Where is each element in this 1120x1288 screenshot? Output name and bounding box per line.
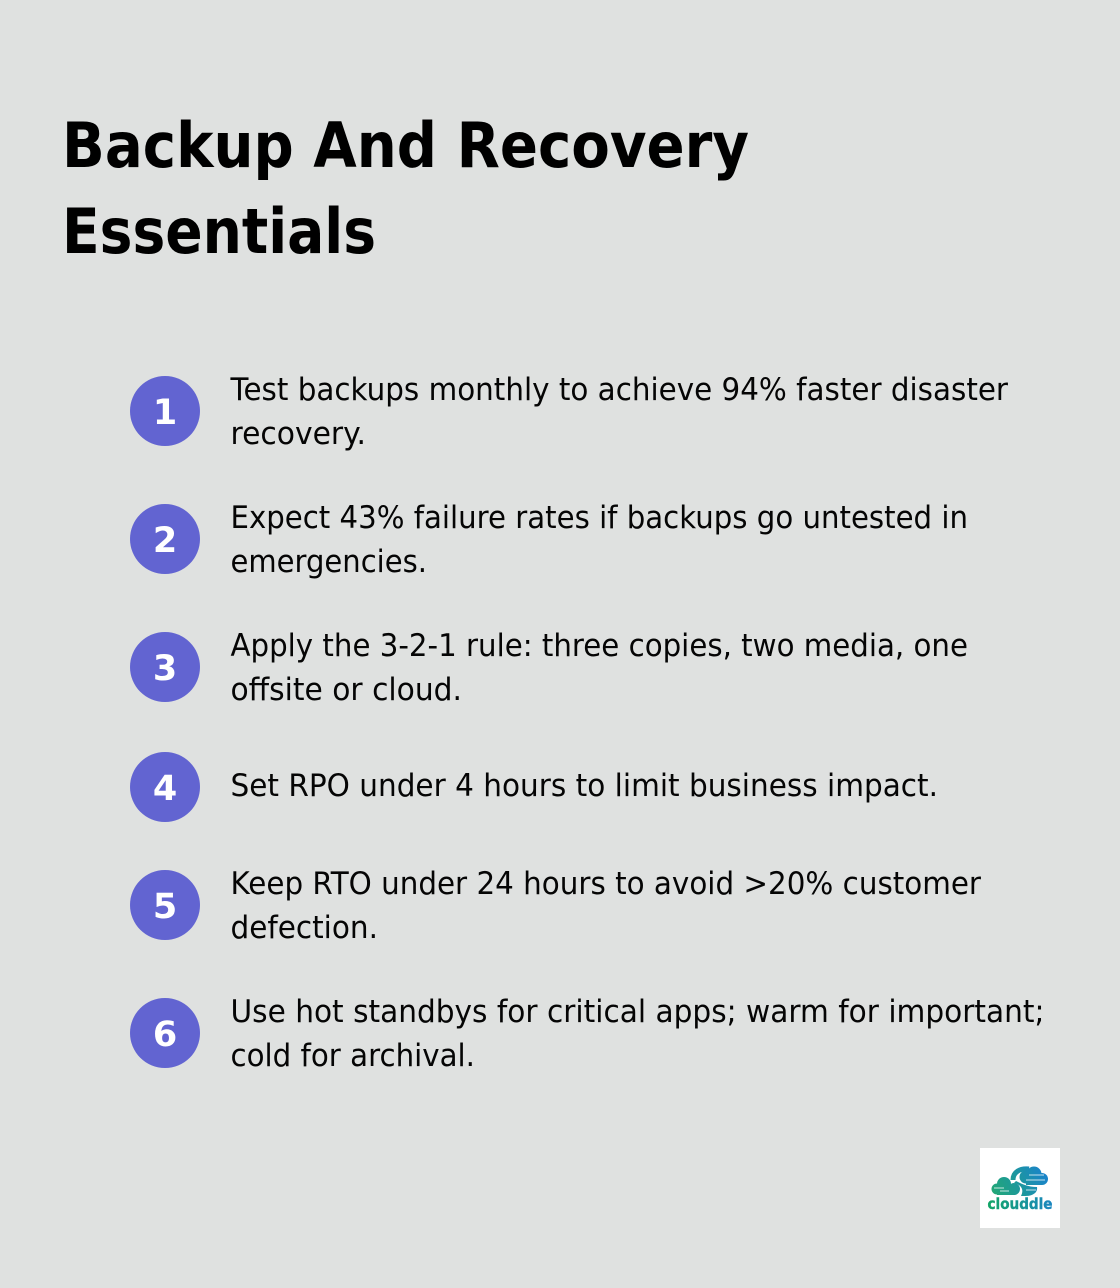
- list item 4: [130, 752, 938, 822]
- list item 1: [130, 372, 1008, 452]
- number badge 6: [130, 998, 200, 1068]
- item 5 text: Keep RTO under 24 hours to avoid >20% customer: [230, 866, 981, 902]
- item 5 text: defection.: [230, 910, 378, 946]
- title: Essentials: [62, 195, 376, 268]
- list item 3: [130, 628, 968, 708]
- item 3 text: Apply the 3-2-1 rule: three copies, two media, one: [230, 628, 968, 664]
- item 1 text: recovery.: [230, 416, 366, 452]
- list item 6: [130, 994, 1044, 1074]
- item 2 text: [230, 500, 968, 580]
- list item 5: [130, 866, 981, 946]
- item 3 text: [230, 628, 968, 708]
- item 5 text: [230, 866, 981, 946]
- number badge 2: 2: [153, 521, 177, 561]
- item 6 text: cold for archival.: [230, 1038, 475, 1074]
- number badge 4: 4: [153, 769, 177, 809]
- item 2 text: Expect 43% failure rates if backups go untested in: [230, 500, 968, 536]
- number badge 5: 5: [153, 887, 177, 927]
- item 6 text: [230, 994, 1044, 1074]
- number badge 5: [130, 870, 200, 940]
- logo: clouddle: [980, 1148, 1060, 1228]
- logo wordmark: clouddle: [988, 1195, 1052, 1213]
- number badge 6: 6: [153, 1015, 177, 1055]
- item 6 text: Use hot standbys for critical apps; warm for important;: [230, 994, 1044, 1030]
- number badge 3: 3: [153, 649, 177, 689]
- number badge 3: [130, 632, 200, 702]
- item 2 text: emergencies.: [230, 544, 427, 580]
- title: Backup And Recovery: [62, 109, 749, 182]
- title: [62, 109, 749, 268]
- item 1 text: Test backups monthly to achieve 94% faster disaster: [230, 372, 1008, 408]
- number badge 1: 1: [153, 393, 177, 433]
- item 3 text: offsite or cloud.: [230, 672, 462, 708]
- icon: clouds: [992, 1166, 1048, 1196]
- number badge 4: [130, 752, 200, 822]
- number badge 2: [130, 504, 200, 574]
- item 4 text: Set RPO under 4 hours to limit business impact.: [230, 768, 938, 804]
- number badge 1: [130, 376, 200, 446]
- item 1 text: [230, 372, 1008, 452]
- list item 2: [130, 500, 968, 580]
